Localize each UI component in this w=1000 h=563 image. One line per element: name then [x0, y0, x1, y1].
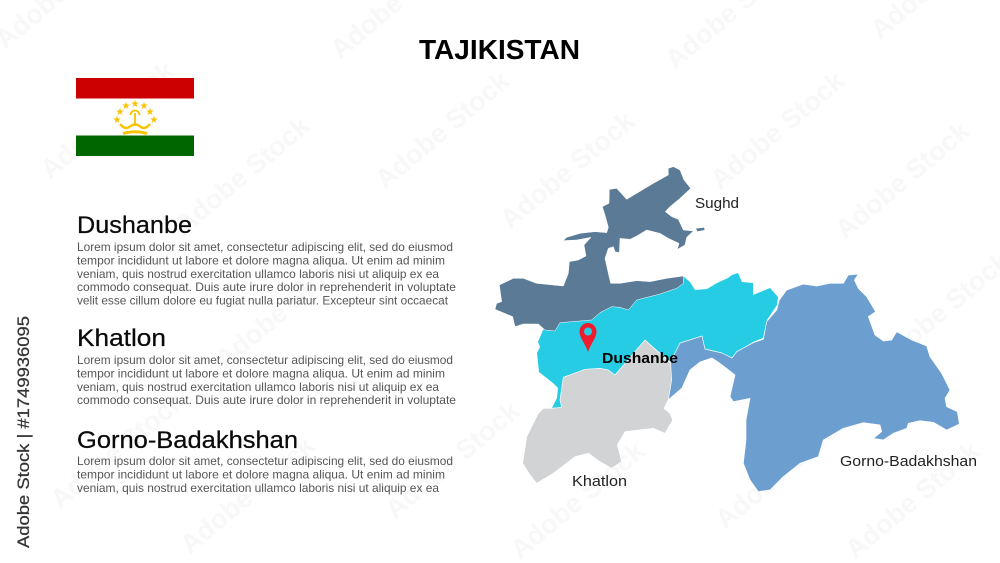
text: Adobe Stock [380, 395, 526, 525]
text: Adobe Stock [45, 385, 191, 515]
label: Gorno-Badakhshan: Gorno-Badakhshan [840, 453, 977, 470]
flag of Tajikistan: ★ [140, 101, 149, 112]
flag of Tajikistan: ★ [113, 115, 122, 126]
text block: Gorno-Badakhshan: Lorem ipsum dolor sit amet, consectetur adipiscing elit, sed do eiusmod [77, 454, 453, 468]
text block: Khatlon: Khatlon [77, 325, 166, 352]
label: Dushanbe: Dushanbe [602, 350, 678, 367]
text block: Khatlon: veniam, quis nostrud exercitation ullamco laboris nisi ut aliquip ex ea [77, 380, 439, 394]
text: Adobe Stock [495, 105, 641, 235]
text block: Khatlon: Lorem ipsum dolor sit amet, consectetur adipiscing elit, sed do eiusmod [77, 353, 453, 367]
region: Dushanbe (cyan) [537, 273, 778, 408]
text block: Khatlon [77, 325, 456, 407]
text: Adobe Stock [505, 435, 651, 563]
island of Sughd [696, 228, 705, 231]
text block: Gorno-Badakhshan: veniam, quis nostrud exercitation ullamco laboris nisi ut aliquip ex ea [77, 481, 439, 495]
text: Adobe Stock [170, 110, 316, 240]
title: TAJIKISTAN [419, 34, 580, 65]
text: Adobe Stock [830, 115, 976, 245]
flag of Tajikistan: ★ [150, 115, 159, 126]
region: Sughd (dark slate) [495, 167, 693, 331]
text block: Gorno-Badakhshan: tempor incididunt ut labore et dolore magna aliqua. Ut enim ad minim [77, 467, 445, 481]
text: Adobe Stock [705, 65, 851, 195]
text: Adobe Stock [710, 405, 856, 535]
icon: map pin [580, 323, 596, 352]
flag of Tajikistan: ★ [131, 99, 140, 110]
text block: Khatlon: commodo consequat. Duis aute irure dolor in reprehenderit in voluptate [77, 393, 456, 407]
flag of Tajikistan: ★ [146, 107, 155, 118]
text block: Dushanbe: velit esse cillum dolore eu fugiat nulla pariatur. Excepteur sint occaecat [77, 294, 449, 308]
region: Khatlon (grey) [523, 340, 673, 483]
map of Tajikistan [495, 167, 959, 492]
text block: Gorno-Badakhshan [77, 427, 453, 495]
text block: Dushanbe: Lorem ipsum dolor sit amet, consectetur adipiscing elit, sed do eiusmod [77, 240, 453, 254]
text block: Gorno-Badakhshan: Gorno-Badakhshan [77, 427, 298, 454]
text: Adobe Stock [840, 435, 986, 563]
label: Sughd: Sughd [695, 195, 739, 212]
text block: Dushanbe: veniam, quis nostrud exercitation ullamco laboris nisi ut aliquip ex ea [77, 267, 439, 281]
side credit text: Adobe Stock | #1749936095 [14, 316, 33, 548]
text: Adobe Stock [370, 65, 516, 195]
text block: Dushanbe: tempor incididunt ut labore et dolore magna aliqua. Ut enim ad minim [77, 253, 445, 267]
flag of Tajikistan [76, 78, 194, 156]
flag of Tajikistan: ★ [116, 107, 125, 118]
text block: Dushanbe: commodo consequat. Duis aute irure dolor in reprehenderit in voluptate [77, 280, 456, 294]
text block: Khatlon: tempor incididunt ut labore et dolore magna aliqua. Ut enim ad minim [77, 366, 445, 380]
text block: Dushanbe: Dushanbe [77, 212, 192, 239]
text block: Dushanbe [77, 212, 456, 308]
text: Adobe Stock [175, 430, 321, 560]
text: Adobe Stock [210, 245, 356, 375]
label: Khatlon: Khatlon [572, 473, 627, 490]
text: Adobe Stock [35, 55, 181, 185]
region: Gorno-Badakhshan (blue) [668, 274, 959, 492]
flag of Tajikistan: ★ [122, 101, 131, 112]
